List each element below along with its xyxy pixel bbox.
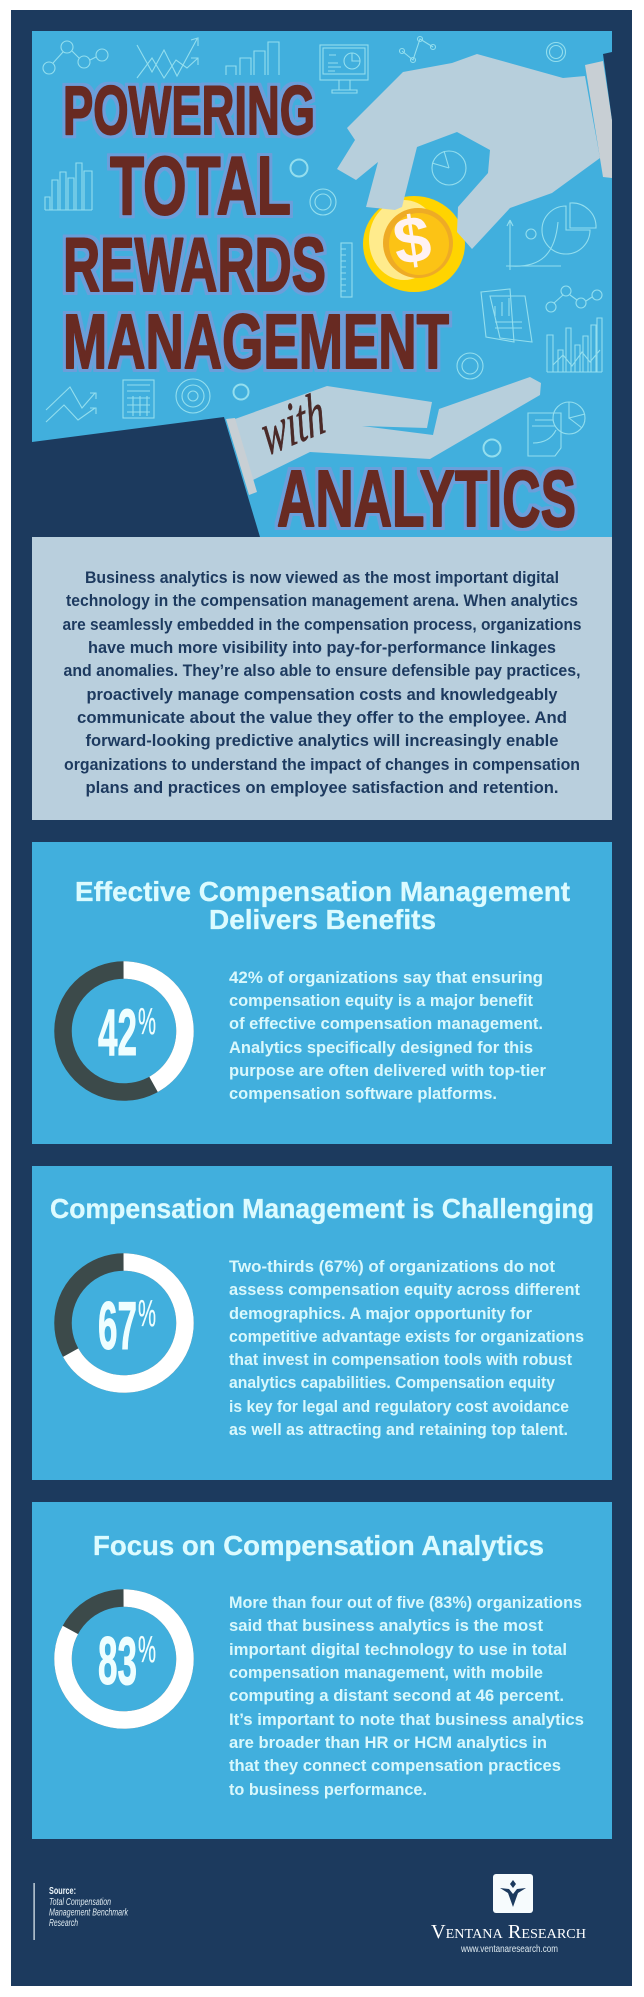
icon: report and pie [528,402,585,456]
icon: rising bar chart [226,42,279,75]
lower shirt cuff [226,418,257,495]
intro text: proactively manage compensation costs and knowledgeably [86,686,558,704]
analytics focus text: computing a distant second at 46 percent. [229,1687,564,1705]
analytics focus text: are broader than HR or HCM analytics in [229,1734,547,1752]
icon: lower ring [484,440,500,456]
intro text: Business analytics is now viewed as the most important digital [85,569,559,587]
heading: challenges: Compensation Management is Challenging [50,1193,594,1224]
panel: challenges [32,1166,612,1480]
analytics focus text: compensation management, with mobile [229,1664,543,1682]
challenges text [229,1258,584,1439]
icon: ring [234,384,248,400]
challenges text: competitive advantage exists for organizations [229,1328,584,1346]
icon: calculator [123,380,154,418]
analytics focus text [229,1594,584,1799]
title: POWERING [63,72,315,149]
icon: small ring [290,160,308,176]
benefits text: compensation equity is a major benefit [229,992,533,1010]
heading: analytics focus: Focus on Compensation Analytics [93,1530,544,1561]
lower open hand [226,377,541,495]
panel: analytics focus [32,1502,612,1839]
analytics focus text: to business performance. [229,1781,427,1799]
challenges text: demographics. A major opportunity for [229,1305,533,1323]
panel: hero banner [32,31,612,543]
donut chart: 67%: 67 [98,1288,137,1364]
analytics focus text: More than four out of five (83%) organizations [229,1594,582,1612]
donut chart: 42%: % [138,1001,156,1043]
coin dollar sign: $ [389,200,435,279]
intro text: and anomalies. They’re also able to ensure defensible pay practices, [64,662,580,680]
donut chart: 67%: % [138,1293,156,1335]
intro text: plans and practices on employee satisfaction and retention. [86,779,558,797]
analytics focus text: that they connect compensation practices [229,1757,561,1775]
benefits text: purpose are often delivered with top-tier [229,1062,547,1080]
icon: gear top right [546,42,566,62]
title: TOTAL [110,139,291,232]
title: REWARDS [63,223,326,308]
icon: documents [481,289,532,342]
icon: zigzag arrows [137,38,198,78]
intro text: have much more visibility into pay-for-performance linkages [88,639,556,657]
icon: scatter line [400,36,436,62]
panel: introduction [32,537,612,820]
heading: benefits [75,876,570,935]
intro text: forward-looking predictive analytics will increasingly enable [86,732,558,750]
logo wordmark: Ventana Research [431,1921,586,1943]
upper sleeve [603,52,612,120]
icon: gold coin [363,196,465,292]
benefits text: compensation software platforms. [229,1085,497,1103]
background analytics icons [43,36,602,456]
icon: bar chart left [45,163,92,210]
intro text: communicate about the value they offer to the employee. And [77,709,567,727]
challenges text: assess compensation equity across different [229,1281,580,1299]
title: MANAGEMENT [63,299,449,385]
logo mark [493,1874,533,1913]
icon: axes and pie chart [506,203,596,270]
benefits text: 42% of organizations say that ensuring [229,969,543,987]
lower sleeve [32,417,260,537]
source note [34,1883,129,1940]
intro text: organizations to understand the impact of changes in compensation [64,756,580,774]
benefits text [229,969,547,1103]
title [63,72,576,543]
intro text [62,569,582,797]
challenges text: Two-thirds (67%) of organizations do not [229,1258,556,1276]
icon: ruler [341,243,352,297]
analytics focus text: important digital technology to use in total [229,1641,567,1659]
challenges text: analytics capabilities. Compensation equity [229,1374,556,1392]
heading: benefits: Delivers Benefits [209,904,436,935]
intro text: technology in the compensation management arena. When analytics [66,592,578,610]
benefits text: Analytics specifically designed for this [229,1039,533,1057]
donut chart: 67% [63,1262,185,1384]
title script word: with: with [257,379,330,470]
challenges text: as well as attracting and retaining top talent. [229,1421,568,1439]
source note: Total Compensation [49,1897,111,1908]
donut chart: 83%: % [138,1629,156,1671]
icon: bars with trend [547,318,602,372]
source note: Research [49,1918,78,1929]
challenges text: is key for legal and regulatory cost avoidance [229,1398,569,1416]
benefits text: of effective compensation management. [229,1015,543,1033]
donut chart: 83%: 83 [98,1623,137,1699]
icon: wheel [176,379,210,413]
source note: Management Benchmark [49,1908,129,1918]
icon: lower zigzag [46,387,96,422]
heading: benefits: Effective Compensation Management [75,876,570,907]
analytics focus text: It’s important to note that business analytics [229,1711,584,1729]
donut chart: 42%: 42 [98,995,137,1069]
icon: monitor with pie [320,45,368,93]
icon: gear centre [310,189,336,215]
analytics focus text: said that business analytics is the most [229,1617,544,1635]
challenges text: that invest in compensation tools with robust [229,1351,572,1369]
source note: Source: [49,1886,76,1897]
upper hand with coin [337,52,612,249]
icon: pie under hand [432,151,466,185]
logo url: www.ventanaresearch.com [460,1944,558,1955]
panel: benefits [32,842,612,1144]
logo: Ventana Research [431,1874,586,1955]
icon: nodes right [546,286,602,312]
intro text: are seamlessly embedded in the compensation process, organizations [62,616,582,634]
donut chart: 42% [63,970,185,1092]
icon: gear right [457,353,483,379]
upper shirt cuff [585,61,612,178]
donut chart: 83% [63,1598,185,1720]
icon: node line chart [43,41,108,74]
